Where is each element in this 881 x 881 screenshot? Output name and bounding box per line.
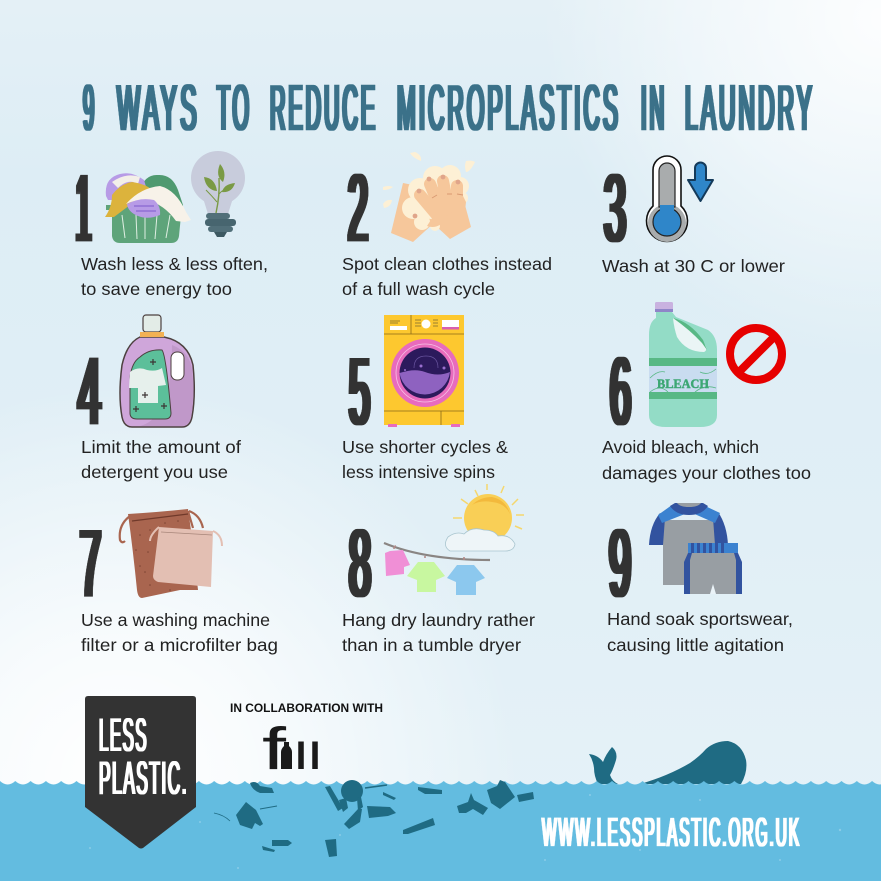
step 9: hand soak: 9: [609, 510, 631, 617]
step 6: avoid bleach: 6: [610, 338, 631, 445]
plastic debris: [214, 780, 534, 857]
caption: causing little agitation: [607, 635, 784, 655]
icon: plant light bulb: [191, 151, 245, 237]
logo: Fill: f: [262, 716, 287, 782]
icon: bleach bottle: BLEACH: [657, 376, 709, 391]
step 4: detergent: 4: [78, 338, 101, 445]
logo: Fill: ll: [294, 736, 322, 778]
step 3: low temperature: 3: [604, 155, 626, 262]
step 8: hang dry: 8: [349, 510, 371, 617]
icon: prohibition sign: [730, 328, 782, 380]
caption: [602, 437, 811, 483]
caption: Wash less & less often,: [81, 254, 268, 274]
icon: sun and cloud: [445, 484, 524, 551]
caption: [342, 254, 552, 299]
icon: washing machine: [384, 315, 464, 427]
step 1: wash less: 1: [76, 155, 91, 262]
collaboration label: IN COLLABORATION WITH: [230, 701, 383, 715]
icon: thermometer: [646, 156, 687, 242]
caption: of a full wash cycle: [342, 279, 495, 299]
caption: [81, 254, 268, 299]
caption: [81, 610, 278, 655]
caption: to save energy too: [81, 279, 232, 299]
caption: than in a tumble dryer: [342, 635, 521, 655]
step 5: shorter cycles: 5: [349, 338, 370, 445]
icon: microfilter bags: [120, 509, 222, 598]
caption: [342, 610, 535, 655]
icon: down arrow: [688, 162, 713, 201]
logo: Fill: [262, 716, 322, 782]
title: IN: [641, 71, 667, 144]
step 3: low temperature: [602, 155, 785, 276]
title: WAYS: [117, 71, 200, 144]
step 9: hand soak: [607, 503, 793, 655]
title: [83, 71, 815, 144]
caption: Spot clean clothes instead: [342, 254, 552, 274]
icon: sportswear: [649, 503, 742, 594]
step 8: hang dry: [342, 484, 535, 655]
title: 9: [83, 71, 97, 144]
icon: detergent bottle: [120, 315, 194, 427]
caption: Avoid bleach, which: [602, 437, 759, 457]
title: TO: [217, 71, 252, 144]
caption: [81, 437, 241, 482]
caption: [342, 437, 508, 482]
caption: filter or a microfilter bag: [81, 635, 278, 655]
infographic page: PLASTIC.: [99, 751, 188, 804]
whale: [589, 741, 746, 784]
step 1: wash less: [76, 151, 268, 299]
icon: laundry basket: [105, 173, 191, 243]
icon: soapy hands: [383, 152, 475, 242]
caption: less intensive spins: [342, 462, 495, 482]
caption: Wash at 30 C or lower: [602, 256, 785, 276]
step 7: filter bag: [80, 509, 278, 655]
step 4: detergent: [78, 315, 241, 482]
caption: Use a washing machine: [81, 610, 270, 630]
caption: Hand soak sportswear,: [607, 609, 793, 629]
step 7: filter bag: 7: [80, 510, 101, 617]
icon: bleach bottle: [649, 302, 717, 427]
step 5: shorter cycles: [342, 315, 508, 482]
logo: Less Plastic badge: LESS: [99, 708, 148, 761]
caption: Hang dry laundry rather: [342, 610, 535, 630]
caption: [607, 609, 793, 655]
step 2: spot clean: 2: [348, 155, 368, 262]
logo: Less Plastic badge: [85, 696, 196, 848]
step 6: avoid bleach: [602, 302, 811, 483]
caption: detergent you use: [81, 462, 228, 482]
step 2: spot clean: [342, 152, 552, 299]
caption: damages your clothes too: [602, 463, 811, 483]
ocean: [0, 780, 881, 881]
caption: Use shorter cycles &: [342, 437, 508, 457]
title: REDUCE: [270, 71, 378, 144]
icon: clothesline with shirts: [384, 543, 490, 595]
caption: Limit the amount of: [81, 437, 241, 457]
